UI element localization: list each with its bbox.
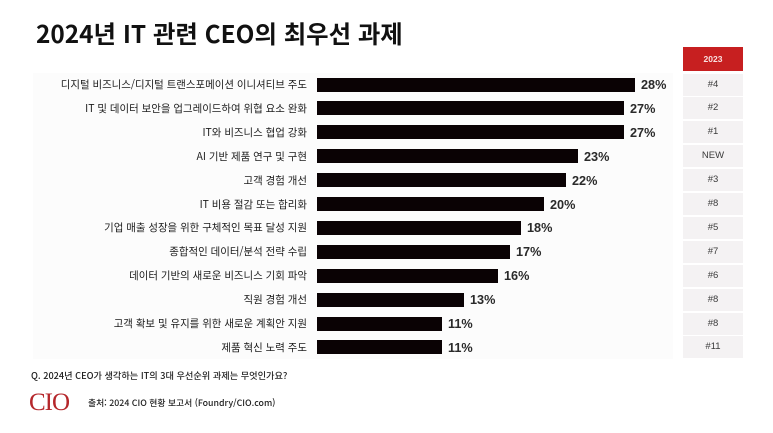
row: 비용 xyxy=(200,193,743,215)
row: 데이터 전략 xyxy=(169,241,743,263)
row: 직원 경험: #8 xyxy=(708,294,718,305)
row: 보안: 27% xyxy=(630,102,655,116)
row: 기회 파악: #6 xyxy=(708,270,718,281)
column header: 2023: 2023 xyxy=(704,54,722,64)
row: 비용: #8 xyxy=(708,198,718,209)
row: 기회 파악: 데이터 기반의 새로운 비즈니스 기회 파악 xyxy=(129,268,307,283)
row: 데이터 전략: 17% xyxy=(516,245,541,259)
row: 고객 경험: 22% xyxy=(572,174,597,188)
row: 제품 혁신 xyxy=(221,336,743,358)
row: 제품 혁신: 제품 혁신 노력 주도 xyxy=(221,340,307,355)
row: 고객 경험: #3 xyxy=(708,174,718,185)
row: 협업 xyxy=(202,121,743,143)
row: 보안: IT 및 데이터 보안을 업그레이드하여 위협 요소 완화 xyxy=(85,101,307,116)
row: 보안 xyxy=(85,97,743,119)
row: 매출: 18% xyxy=(527,221,552,235)
row: 협업: IT와 비즈니스 협업 강화 xyxy=(202,125,307,140)
row: 고객 확보: 고객 확보 및 유지를 위한 새로운 계획안 지원 xyxy=(114,316,307,331)
source: 출처: 2024 CIO 현황 보고서 (Foundry/CIO.com) xyxy=(88,396,275,408)
row: 협업: #1 xyxy=(708,126,718,137)
row: 디지털 비즈니스: 28% xyxy=(641,78,666,92)
row: AI xyxy=(196,145,743,167)
row: 데이터 전략: #7 xyxy=(708,246,718,257)
row: 데이터 전략: 종합적인 데이터/분석 전략 수립 xyxy=(169,244,307,259)
row: 디지털 비즈니스 xyxy=(61,74,743,96)
row: 비용: IT 비용 절감 또는 합리화 xyxy=(200,196,307,212)
row: 협업: 27% xyxy=(630,126,655,140)
row: AI: 23% xyxy=(584,150,609,164)
row: 비용: 20% xyxy=(550,198,575,212)
row: 매출 xyxy=(104,217,743,239)
row: 매출: 기업 매출 성장을 위한 구체적인 목표 달성 지원 xyxy=(104,220,307,235)
row: 고객 확보: #8 xyxy=(708,318,718,328)
row: 고객 확보: 11% xyxy=(448,317,473,331)
row: 기회 파악 xyxy=(129,265,743,287)
survey question: Q. 2024년 CEO가 생각하는 IT의 3대 우선순위 과제는 무엇인가요? xyxy=(31,368,287,382)
row: 고객 경험: 고객 경험 개선 xyxy=(244,173,307,188)
title: 2024년 IT 관련 CEO의 최우선 과제 xyxy=(36,16,403,51)
row: 직원 경험: 직원 경험 개선 xyxy=(244,292,307,307)
row: AI: NEW xyxy=(702,150,724,161)
column header: 2023 xyxy=(683,47,743,71)
row: 기회 파악: 16% xyxy=(504,269,529,283)
row: 고객 경험 xyxy=(244,169,743,191)
row: 디지털 비즈니스: #4 xyxy=(708,78,718,90)
row: 고객 확보 xyxy=(114,313,743,335)
row: AI: AI 기반 제품 연구 및 구현 xyxy=(197,149,307,164)
row: 보안: #2 xyxy=(708,102,718,113)
row: 제품 혁신: #11 xyxy=(705,341,721,352)
row: 디지털 비즈니스: 디지털 비즈니스/디지털 트랜스포메이션 이니셔티브 주도 xyxy=(61,77,307,92)
row: 제품 혁신: 11% xyxy=(448,341,473,355)
row: 직원 경험: 13% xyxy=(470,293,495,307)
logo: CIO: CIO xyxy=(29,388,69,416)
row: 직원 경험 xyxy=(244,289,743,311)
row: 매출: #5 xyxy=(708,222,718,233)
